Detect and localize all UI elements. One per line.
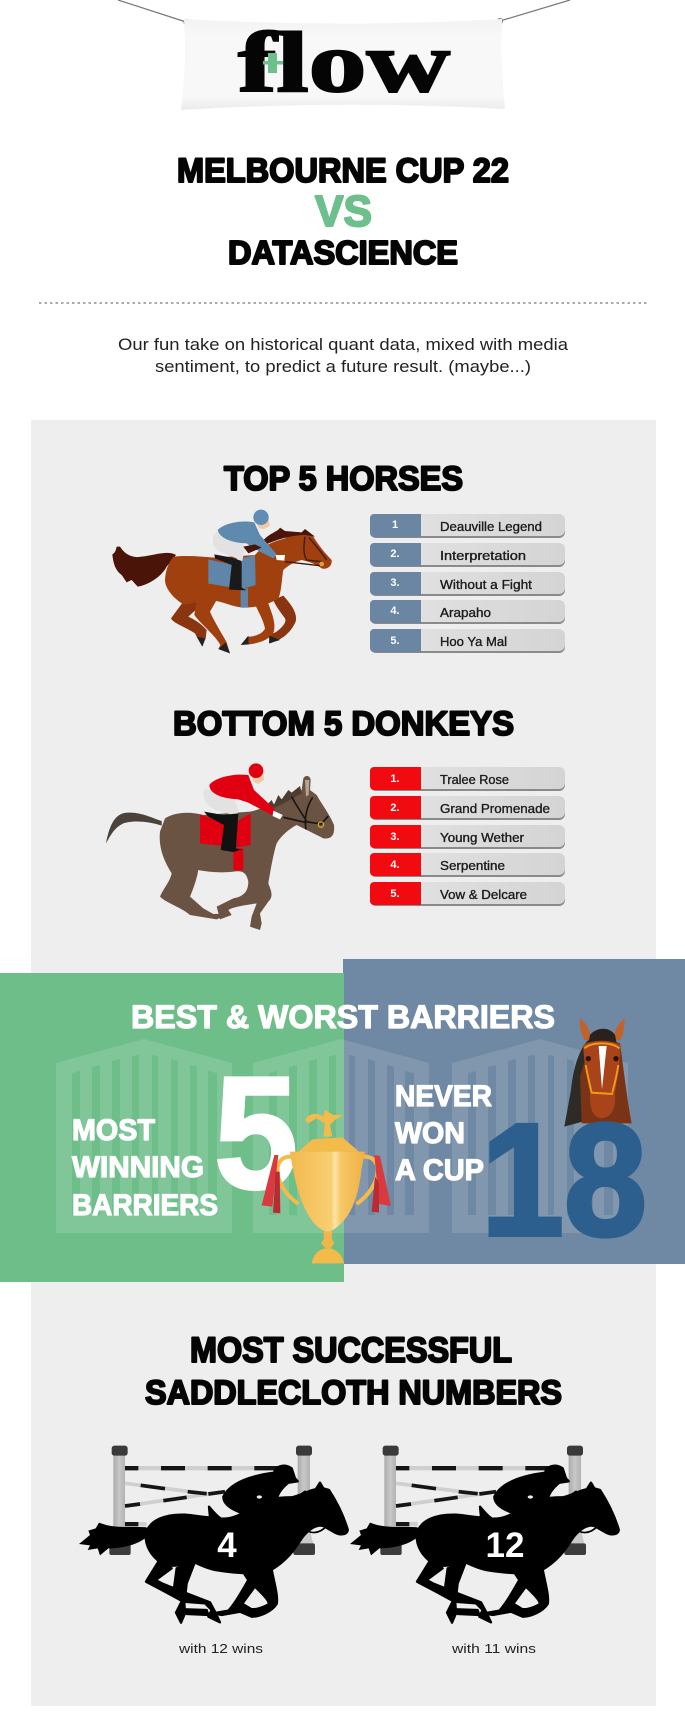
row 4: 4. <box>390 859 400 871</box>
heading: most successful saddlecloth numbers: MOST SUCCESSFUL <box>190 1331 512 1370</box>
row 3: Without a Fight <box>440 578 533 592</box>
never won text <box>395 1080 492 1187</box>
icon: trophy <box>262 1110 391 1263</box>
green half <box>0 973 344 1282</box>
row 1: Deauville Legend <box>440 520 542 534</box>
row 2: Grand Promenade <box>440 802 550 816</box>
row 5 <box>370 882 565 906</box>
row 2: 2. <box>390 802 400 814</box>
never won text: WON <box>395 1117 465 1150</box>
intro text <box>118 335 569 376</box>
logo wordmark: flow <box>238 14 450 110</box>
silhouette: number 4: 4 <box>217 1526 237 1565</box>
row 1: 1. <box>390 773 400 785</box>
row 5 <box>370 629 565 653</box>
caption: with 11 wins: with 11 wins <box>451 1641 537 1656</box>
list: top 5 horses <box>370 514 565 653</box>
most winning text <box>72 1114 218 1222</box>
row 4 <box>370 853 565 877</box>
title <box>177 152 509 271</box>
heading: top 5 horses: TOP 5 HORSES <box>224 460 463 498</box>
row 2 <box>370 543 565 567</box>
row 3 <box>370 825 565 849</box>
row 4: Arapaho <box>440 606 491 620</box>
row 5: 5. <box>390 635 400 647</box>
banner with logo <box>118 0 570 110</box>
caption: with 12 wins: with 12 wins <box>178 1641 264 1656</box>
row 5: 5. <box>390 888 400 900</box>
row 1: 1 <box>392 519 398 531</box>
silhouette: number 4 <box>79 1446 348 1623</box>
illustration: racing horse with blue jockey <box>112 510 332 653</box>
most winning text: BARRIERS <box>72 1189 218 1222</box>
title: MELBOURNE CUP 22 <box>177 152 509 190</box>
row 4: Serpentine <box>440 859 505 873</box>
heading: BEST & WORST BARRIERS <box>131 999 555 1035</box>
row 4 <box>370 600 565 624</box>
illustration: donkey with red jockey <box>106 763 334 930</box>
row 5: Hoo Ya Mal <box>440 635 507 649</box>
title: DATASCIENCE <box>228 234 458 271</box>
silhouette: number 12 <box>350 1446 619 1623</box>
barrier gates <box>56 1039 628 1233</box>
row 2: 2. <box>390 548 400 560</box>
row 5: Vow & Delcare <box>440 888 527 902</box>
heading: bottom 5 donkeys: BOTTOM 5 DONKEYS <box>173 705 514 743</box>
row 2 <box>370 796 565 820</box>
number 18: 18 <box>481 1090 647 1269</box>
blue half <box>343 959 685 1264</box>
panel: best and worst barriers <box>0 959 685 1282</box>
intro text: sentiment, to predict a future result. (maybe...) <box>155 357 531 376</box>
row 2: Interpretation <box>440 549 526 563</box>
row 1: Tralee Rose <box>440 773 509 787</box>
list: bottom 5 donkeys <box>370 767 565 906</box>
title: VS <box>315 187 372 236</box>
never won text: A CUP <box>395 1154 484 1187</box>
icon: horse head <box>564 1018 632 1127</box>
dotted divider <box>39 302 647 304</box>
row 1 <box>370 767 565 791</box>
intro text: Our fun take on historical quant data, mixed with media <box>118 335 569 354</box>
never won text: NEVER <box>395 1080 492 1113</box>
silhouette: number 12: 12 <box>486 1526 524 1565</box>
row 4: 4. <box>390 605 400 617</box>
number 5: 5 <box>214 1043 298 1222</box>
heading: most successful saddlecloth numbers <box>145 1331 562 1412</box>
row 3: Young Wether <box>440 831 524 845</box>
row 3: 3. <box>390 577 400 589</box>
heading: most successful saddlecloth numbers: SADDLECLOTH NUMBERS <box>145 1374 562 1412</box>
most winning text: MOST <box>72 1114 155 1147</box>
background panel <box>31 420 656 1706</box>
most winning text: WINNING <box>72 1151 204 1184</box>
row 3: 3. <box>390 831 400 843</box>
row 3 <box>370 572 565 596</box>
row 1 <box>370 514 565 538</box>
